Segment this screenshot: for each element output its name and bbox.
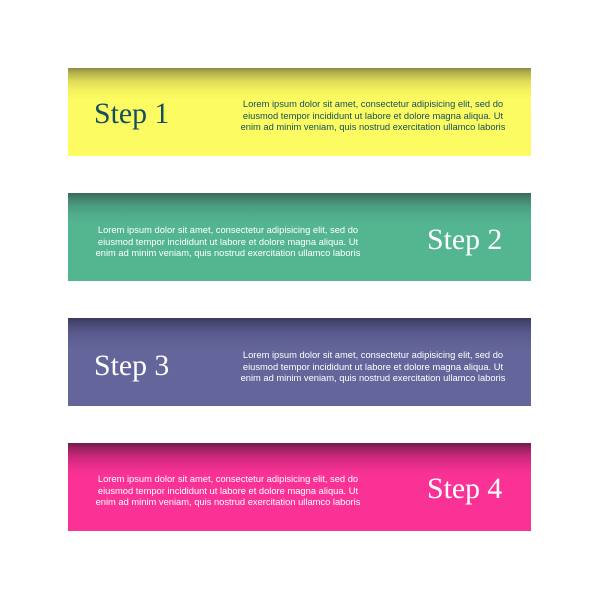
text block: step 3: enim ad minim veniam, quis nostrud exercitation ullamco laboris xyxy=(241,373,505,383)
heading: step 2: Step 2 xyxy=(427,223,502,256)
text block: step 1: Lorem ipsum dolor sit amet, consectetur adipisicing elit, sed do xyxy=(243,99,503,109)
text block: step 4: enim ad minim veniam, quis nostrud exercitation ullamco laboris xyxy=(96,497,360,507)
heading: step 4: Step 4 xyxy=(427,472,502,505)
panel: step 2 xyxy=(68,193,531,281)
text block: step 3 xyxy=(241,350,506,383)
heading: step 1: Step 1 xyxy=(94,97,169,130)
text block: step 2: eiusmod tempor incididunt ut labore et dolore magna aliqua. Ut xyxy=(98,236,358,246)
text block: step 1: enim ad minim veniam, quis nostrud exercitation ullamco laboris xyxy=(241,122,505,132)
text block: step 2: Lorem ipsum dolor sit amet, consectetur adipisicing elit, sed do xyxy=(98,225,358,235)
text block: step 3: eiusmod tempor incididunt ut labore et dolore magna aliqua. Ut xyxy=(243,362,503,372)
text block: step 4: Lorem ipsum dolor sit amet, consectetur adipisicing elit, sed do xyxy=(98,474,358,484)
text block: step 2: enim ad minim veniam, quis nostrud exercitation ullamco laboris xyxy=(96,248,360,258)
text block: step 4 xyxy=(96,474,360,507)
text block: step 1 xyxy=(241,99,506,132)
heading: step 3: Step 3 xyxy=(94,349,169,382)
text block: step 1: eiusmod tempor incididunt ut labore et dolore magna aliqua. Ut xyxy=(243,110,503,120)
panel: step 1 xyxy=(68,68,531,156)
panel: step 3 xyxy=(68,318,531,406)
panel: step 4 xyxy=(68,443,531,531)
text block: step 2 xyxy=(96,225,360,258)
text block: step 3: Lorem ipsum dolor sit amet, consectetur adipisicing elit, sed do xyxy=(243,350,503,360)
text block: step 4: eiusmod tempor incididunt ut labore et dolore magna aliqua. Ut xyxy=(98,486,358,496)
